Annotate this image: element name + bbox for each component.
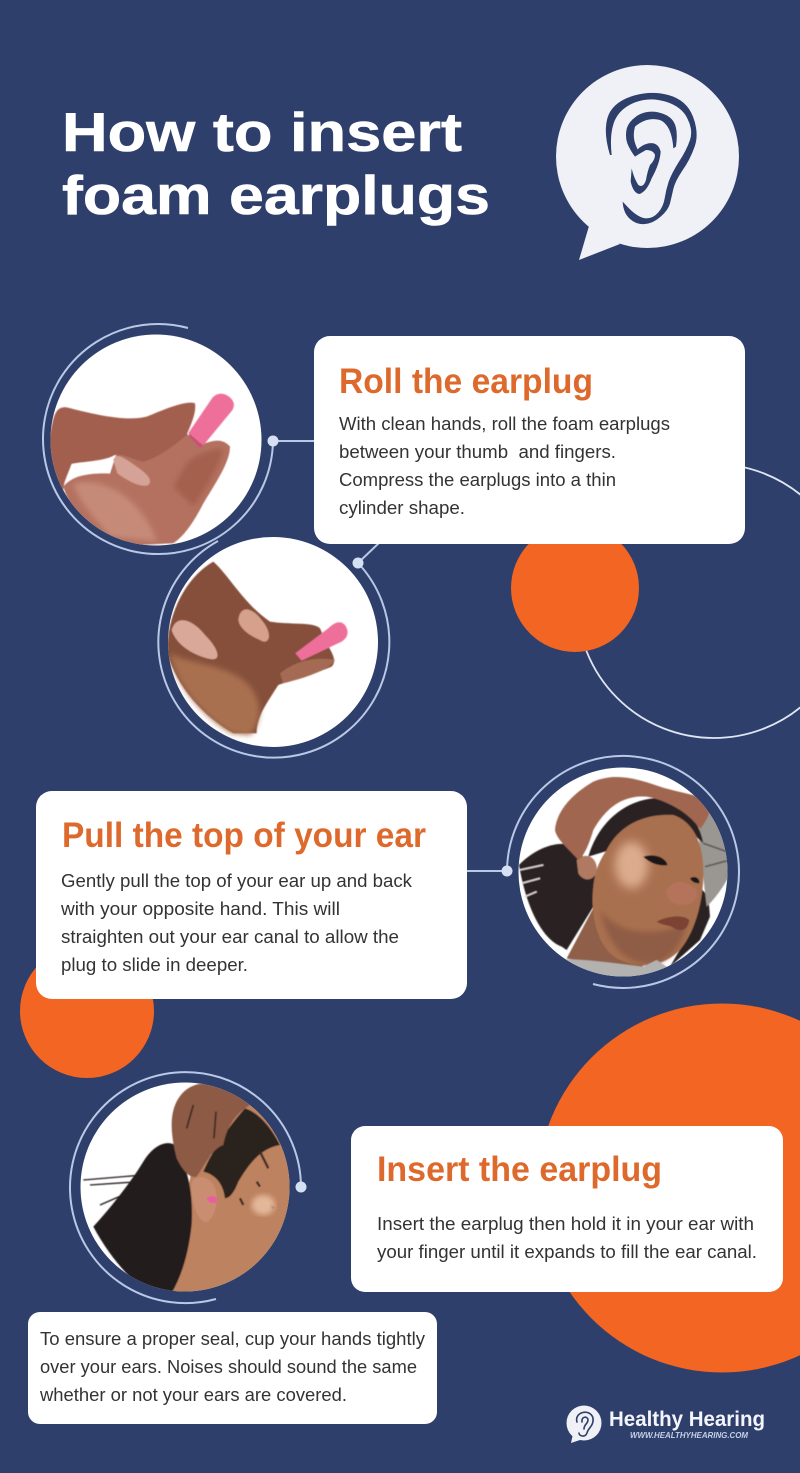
step 1b ring	[158, 541, 389, 758]
text block: pull instructions: straighten out your ear canal to allow the	[61, 926, 399, 947]
text block: insert instructions: your finger until it expands to fill the ear canal.	[377, 1241, 757, 1262]
panel: roll the earplug	[314, 336, 745, 544]
panel: insert the earplug	[351, 1126, 783, 1292]
text block: pull instructions: Gently pull the top of your ear up and back	[61, 870, 413, 891]
logo: Healthy Hearing: Healthy Hearing	[609, 1408, 765, 1431]
decorative background circles	[20, 464, 800, 1372]
text block: pull instructions: with your opposite hand. This will	[60, 898, 340, 919]
step 1b dot	[352, 558, 364, 568]
connectors	[273, 441, 507, 871]
icon: ear in speech bubble	[556, 65, 739, 260]
callout: proper seal tip: To ensure a proper seal, cup your hands tightly	[40, 1328, 426, 1349]
text block: roll instructions: Compress the earplugs into a thin	[339, 469, 616, 490]
heading: roll the earplug: Roll the earplug	[339, 362, 593, 401]
callout: proper seal tip	[28, 1312, 437, 1424]
step 2 ring	[507, 756, 739, 988]
text block: roll instructions: cylinder shape.	[339, 497, 465, 518]
step 3 photo: inserting the earplug	[80, 1082, 290, 1292]
panel: pull the top of your ear	[36, 791, 467, 999]
step 2 photo: pulling the ear	[518, 768, 736, 980]
callout: proper seal tip: over your ears. Noises should sound the same	[40, 1356, 417, 1377]
title	[62, 101, 490, 226]
step 1b photo: compressed earplug	[167, 537, 378, 747]
step 3 ring	[70, 1072, 301, 1303]
heading: pull the top of your ear: Pull the top of your ear	[62, 816, 426, 855]
text block: pull instructions: plug to slide in deeper.	[61, 954, 248, 975]
step 2 dot	[502, 866, 512, 876]
text block: insert instructions	[377, 1213, 757, 1262]
title: How to insert	[62, 101, 462, 163]
title: foam earplugs	[62, 164, 490, 226]
step 1 dot	[268, 436, 278, 446]
step 1 photo: rolling the earplug	[47, 334, 261, 547]
step 1 ring	[43, 324, 273, 554]
text block: roll instructions: With clean hands, roll the foam earplugs	[339, 413, 670, 434]
logo: Healthy Hearing	[566, 1406, 765, 1443]
text block: insert instructions: Insert the earplug then hold it in your ear with	[377, 1213, 754, 1234]
heading: insert the earplug: Insert the earplug	[377, 1150, 662, 1189]
text block: pull instructions	[60, 870, 413, 975]
callout: proper seal tip: whether or not your ears are covered.	[39, 1384, 347, 1405]
text block: roll instructions	[339, 413, 670, 518]
text block: roll instructions: between your thumb and fingers.	[339, 441, 616, 462]
step 3 dot	[296, 1182, 306, 1192]
logo: Healthy Hearing: WWW.HEALTHYHEARING.COM	[630, 1431, 748, 1440]
